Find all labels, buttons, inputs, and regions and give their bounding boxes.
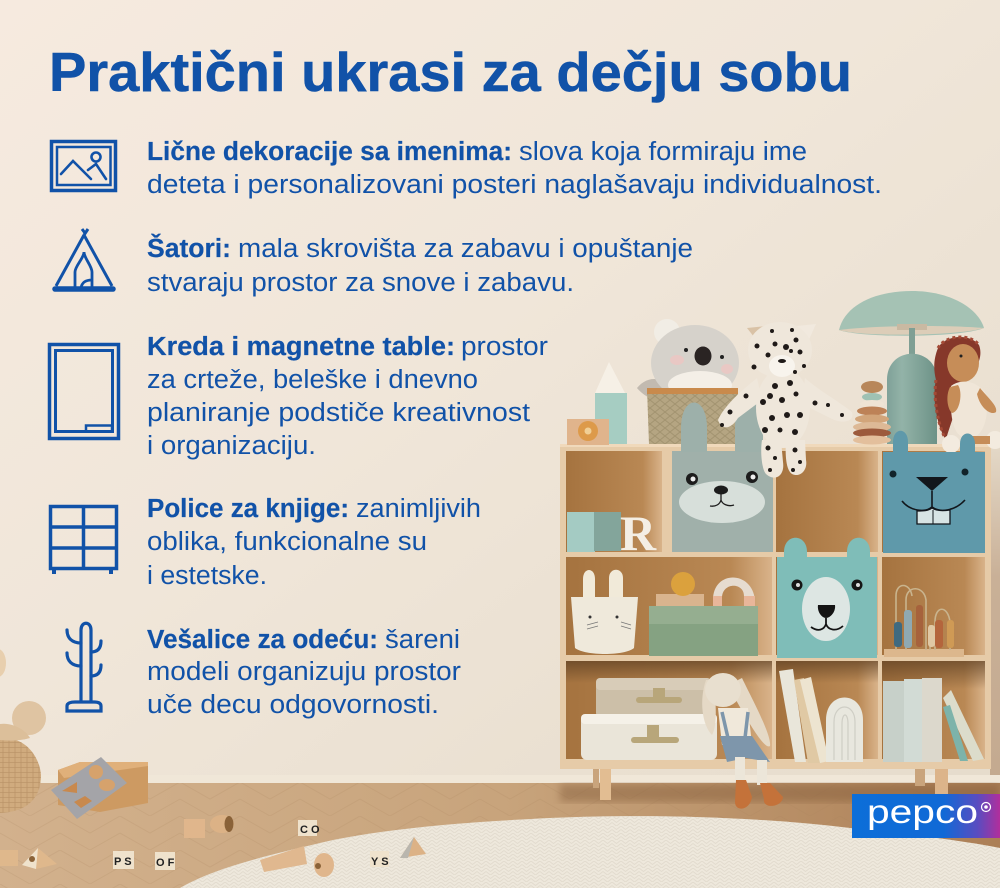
text: chalk and magnetic boards: za crteže, beleške i dnevno: [147, 366, 478, 394]
icon: teepee tent: [55, 229, 113, 289]
icon: coat rack: [67, 623, 101, 711]
text: coat racks: [147, 626, 462, 719]
icon: framed picture: [52, 142, 116, 190]
bunny basket: [571, 570, 638, 654]
shelf shadow on floor: [560, 784, 1000, 802]
wooden shape sorter: [51, 757, 148, 819]
lamp: [839, 291, 984, 444]
text: chalk and magnetic boards: planiranje podstiče kreativnost: [147, 399, 530, 427]
green box with books and yarn ball: [649, 572, 758, 656]
wooden bookcase: [560, 444, 991, 800]
beaver storage box: [883, 431, 985, 553]
wooden floor: [0, 783, 1000, 888]
abacus toy: [884, 586, 964, 657]
wicker basket and mouse ears, left edge: [0, 649, 46, 813]
text: coat racks: šareni: [385, 626, 460, 654]
text: tents: mala skrovišta za zabavu i opuštanje: [238, 235, 693, 263]
rabbit storage box: [672, 400, 773, 552]
koala plush in basket: [637, 319, 739, 401]
toy pencil block and camera: [567, 362, 627, 445]
suitcases: [581, 678, 717, 760]
text: coat racks: Vešalice za odeću:: [147, 626, 378, 654]
stacking ring toy: [853, 381, 891, 444]
scattered wooden toy blocks: P S: [114, 856, 132, 868]
pepco logo: [852, 793, 1000, 838]
pepco logo: pepco: [867, 793, 978, 830]
text: tents: Šatori:: [147, 233, 231, 263]
text: chalk and magnetic boards: Kreda i magnetne table:: [147, 333, 455, 361]
scattered wooden toy blocks: C O: [300, 824, 320, 836]
text: chalk and magnetic boards: [147, 333, 549, 460]
text: personal name decorations: slova koja formiraju ime: [519, 138, 807, 166]
icon: chalkboard: [50, 344, 118, 438]
rug: [180, 816, 1000, 888]
text: tents: stvaraju prostor za snove i zabavu.: [147, 269, 574, 297]
blocks and letter R: R: [620, 505, 657, 561]
wall shade right of the bookcase: [990, 445, 1000, 775]
woven basket: [647, 388, 738, 444]
bear storage box: [777, 538, 877, 658]
icon: bookshelf: [50, 506, 117, 574]
text: coat racks: uče decu odgovornosti.: [147, 691, 439, 719]
text: coat racks: modeli organizuju prostor: [147, 658, 462, 686]
text: chalk and magnetic boards: prostor: [461, 333, 549, 361]
hedgehog plush: [934, 337, 1000, 453]
blocks and letter R: [567, 505, 657, 561]
books and arch ornament: [779, 669, 984, 763]
text: personal name decorations: Lične dekoracije sa imenima:: [147, 138, 512, 166]
text: tents: [147, 233, 693, 297]
bunny doll: [702, 673, 783, 809]
text: personal name decorations: deteta i personalizovani posteri naglašavaju individualnost.: [147, 171, 882, 199]
scattered wooden toy blocks: Y S: [371, 856, 389, 868]
scattered wooden toy blocks: O F: [156, 857, 175, 869]
scattered wooden toy blocks: [0, 815, 426, 877]
text: bookshelves: [147, 495, 481, 590]
text: bookshelves: Police za knjige:: [147, 495, 349, 523]
text: bookshelves: i estetske.: [147, 562, 267, 590]
text: bookshelves: zanimljivih: [356, 495, 481, 523]
text: bookshelves: oblika, funkcionalne su: [147, 528, 427, 556]
leopard plush: [718, 322, 852, 478]
text: chalk and magnetic boards: i organizaciju.: [147, 432, 316, 460]
skirting board: [0, 775, 1000, 784]
text: personal name decorations: [147, 138, 882, 199]
title: Praktični ukrasi za dečju sobu: [49, 41, 852, 103]
